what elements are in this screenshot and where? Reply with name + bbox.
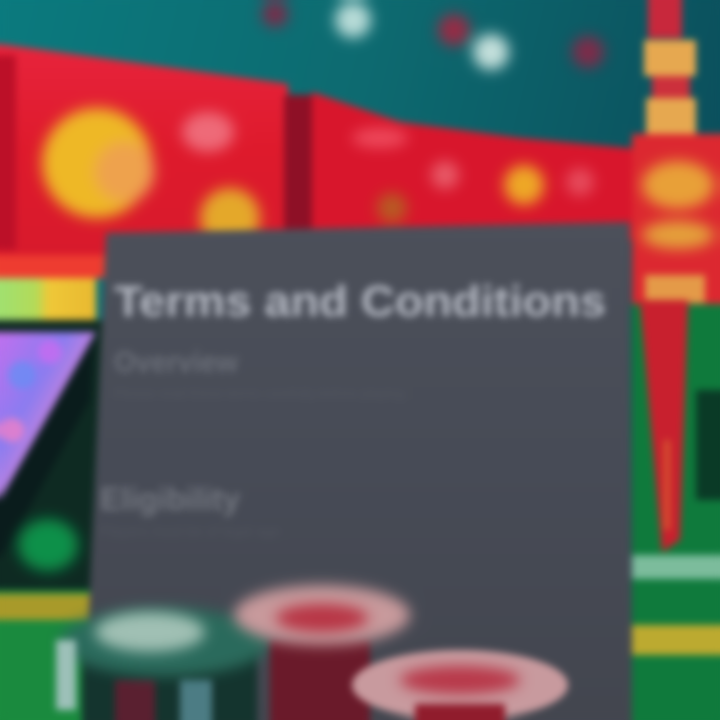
background: top decorations xyxy=(262,1,604,70)
casino chips xyxy=(56,585,568,720)
left side: rainbow band xyxy=(0,240,110,500)
subheading: second section: Eligibility xyxy=(100,481,240,517)
panel background xyxy=(84,222,632,720)
chip: red and white, right xyxy=(352,650,568,720)
body text: second section: Players must be of legal age xyxy=(100,523,280,539)
heading: Terms and Conditions xyxy=(114,277,606,326)
banner motifs: circles xyxy=(42,108,594,248)
chip: green and white xyxy=(56,608,270,720)
left side: dark and green lower area xyxy=(0,320,120,720)
subheading: first section: Overview xyxy=(114,346,239,379)
red banner: right xyxy=(312,92,650,240)
red banner: left xyxy=(0,44,294,255)
body text: first section: Please read these terms carefully before playing xyxy=(114,385,404,401)
right side: green felt xyxy=(632,300,720,720)
right side: striped pole xyxy=(632,0,720,552)
panel: terms and conditions xyxy=(84,222,632,720)
chip: red and white, middle xyxy=(234,585,410,720)
banner gap: dark red seam xyxy=(284,95,314,235)
